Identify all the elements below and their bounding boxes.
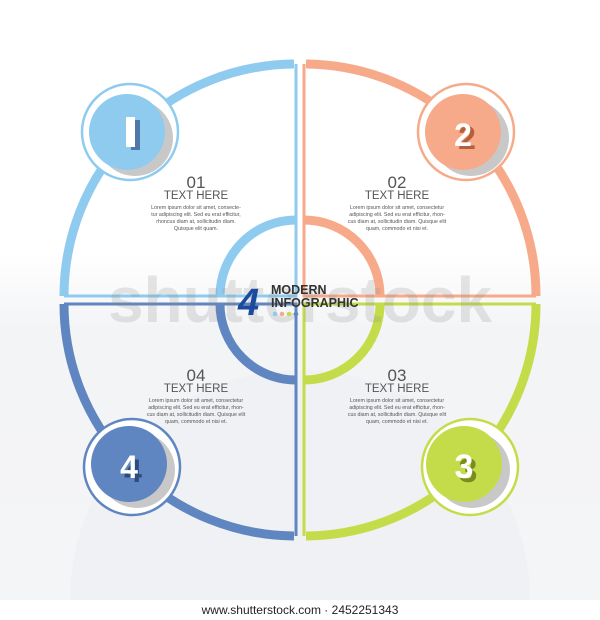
text block 01: Lorem ipsum dolor sit amet, consecte- — [151, 205, 241, 211]
text block 02: Lorem ipsum dolor sit amet, consectetur — [350, 205, 444, 211]
badge 4 — [84, 419, 180, 515]
text block 04: adipiscing elit. Sed eu erat efficitur, rhon- — [148, 405, 244, 411]
badge 2: 2 — [458, 120, 476, 156]
text block 03: quam, commodo et nisi et. — [366, 419, 428, 425]
text block 03: 03 — [388, 366, 406, 385]
center title — [237, 282, 358, 324]
text block 04: cus diam at, sollicitudin diam. Quisque elit — [147, 412, 246, 418]
quadrant 3 — [304, 304, 536, 536]
badge 2 — [418, 84, 514, 180]
text block 02: 02 — [388, 173, 406, 192]
center title: MODERN — [271, 283, 327, 297]
text block 04: 04 — [187, 366, 205, 385]
text block 02: adipiscing elit. Sed eu erat efficitur, rhon- — [349, 212, 445, 218]
badge 4: 4 — [124, 453, 142, 489]
text block 04: TEXT HERE — [164, 383, 228, 395]
quadrant 4 — [64, 304, 296, 536]
text block 03: adipiscing elit. Sed eu erat efficitur, rhon- — [349, 405, 445, 411]
badge 2: 2 — [454, 117, 472, 153]
badge 3: 3 — [459, 452, 477, 490]
text block 04: Lorem ipsum dolor sit amet, consectetur — [149, 398, 243, 404]
badge 1 — [82, 84, 178, 180]
text block 01: tur adipiscing elit. Sed eu erat efficitur, — [151, 212, 241, 218]
watermark: shutterstock — [108, 264, 492, 336]
text block 01: rhoncus diam at, sollicitudin diam. — [156, 219, 236, 225]
text block 01: Quisque elit quam. — [174, 226, 218, 232]
text block 01: TEXT HERE — [164, 190, 228, 202]
center title: INFOGRAPHIC — [271, 296, 358, 310]
text block 01: 01 — [187, 173, 205, 192]
badge 3 — [422, 419, 518, 515]
text block 03: TEXT HERE — [365, 383, 429, 395]
text block 01 — [151, 173, 241, 232]
footer: www.shutterstock.com · 2452251343 — [201, 603, 399, 617]
text block 02: quam, commodo et nisi et. — [366, 226, 428, 232]
quadrant 1 — [64, 64, 296, 296]
text block 03 — [348, 366, 447, 425]
text block 02: cus diam at, sollicitudin diam. Quisque elit — [348, 219, 447, 225]
badge 3: 3 — [455, 448, 473, 486]
quadrant 2 — [304, 64, 536, 296]
text block 03: Lorem ipsum dolor sit amet, consectetur — [350, 398, 444, 404]
badge 4: 4 — [120, 449, 138, 485]
text block 04 — [147, 366, 246, 425]
text block 02 — [348, 173, 447, 232]
text block 02: TEXT HERE — [365, 190, 429, 202]
center title: 4 — [237, 282, 259, 324]
text block 04: quam, commodo et nisi et. — [165, 419, 227, 425]
text block 03: cus diam at, sollicitudin diam. Quisque elit — [348, 412, 447, 418]
